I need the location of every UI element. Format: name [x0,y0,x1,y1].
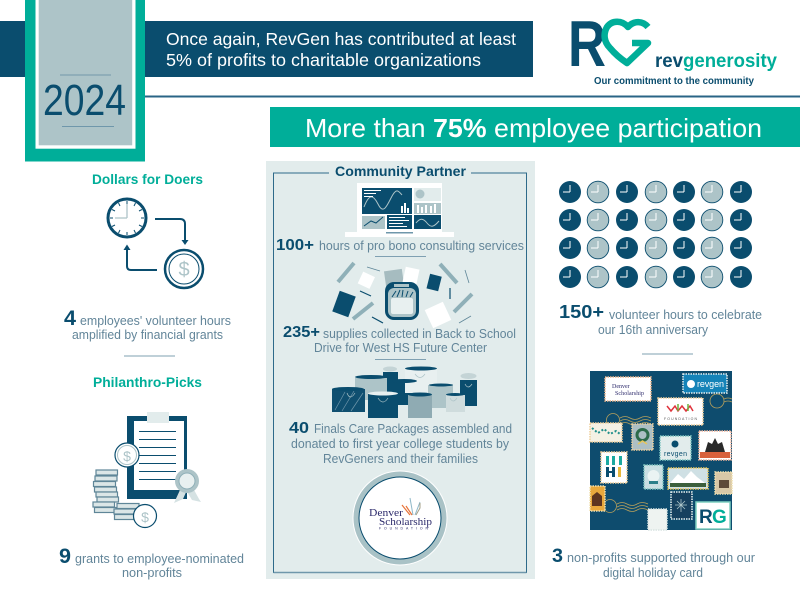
postmarks [604,394,732,512]
stamps [590,374,732,530]
section: Philanthro-Picks [59,375,244,580]
stat: 3 non-profits [552,546,755,580]
participation banner: More than 75% employee participation [305,113,762,143]
heading: Dollars for Doers [92,172,203,187]
icon: clipboard, coins and award: $ [141,509,149,525]
stat: 235+ supplies: Drive for West HS Future Center [314,341,487,355]
logo: revgenerosity: Our commitment to the community [594,75,754,87]
logo: Denver Scholarship Foundation: FOUNDATION [379,526,428,530]
digital holiday card [590,371,732,530]
header rule [145,96,800,98]
logo: revgenerosity: R [568,7,606,80]
panel heading: Community Partner [335,163,467,179]
banner statement [166,29,516,70]
stat: 4 employees: amplified by financial grants [72,328,223,342]
icon: backpack and school supplies [332,263,472,328]
icon: clipboard, coins and award: $ [123,448,131,464]
stat: 4 employees: employees' volunteer hours [80,314,231,328]
logo: revgenerosity [568,7,777,87]
clock grid [559,181,752,288]
stat: 9 grants [59,545,244,580]
stat: 40 care packages [289,420,512,466]
stat: 4 employees [64,307,231,342]
stamps: revgen [664,451,687,458]
stamps: revgen [697,379,724,389]
icon: clipboard, coins and award [93,412,201,528]
stat: 150+ volunteer hours: 150+ [559,301,604,322]
stat: 235+ supplies: supplies collected in Back to School [323,327,516,341]
heading: Philanthro-Picks [93,375,202,390]
logo: revgenerosity: generosity [683,50,777,72]
stat: 9 grants: 9 [59,545,71,568]
logo: revgenerosity: rev [655,50,683,72]
stat: 235+ supplies [283,324,516,355]
participation banner [270,107,800,147]
stat: 40 care packages: Finals Care Packages assembled and [314,422,512,436]
icon: laptop dashboard [345,183,454,237]
stat: 100+ hours: 100+ [276,237,314,254]
stat: 150+ volunteer hours: volunteer hours to celebrate [609,308,762,322]
icon: clock and coin cycle: $ [178,259,190,281]
panel: community partner [266,161,535,579]
stat: 40 care packages: 40 [289,420,309,437]
stamps: R [699,507,713,528]
stat: 4 employees: 4 [64,307,76,330]
year ribbon: 2024: 2024 [43,76,126,125]
banner statement: 5% of profits to charitable organizations [166,50,481,70]
logo: Denver Scholarship Foundation: Scholarship [379,516,432,528]
logo: Denver Scholarship Foundation [353,471,447,565]
stat: 3 non-profits: 3 [552,546,563,567]
stat: 40 care packages: donated to first year college students by [291,437,510,451]
stamps: Denver [612,384,630,390]
stamps: FOUNDATION [664,417,697,421]
icon: clock and coin cycle [108,199,203,288]
stamps: Scholarship [615,391,644,397]
stat: 100+ hours: hours of pro bono consulting services [319,239,524,253]
stat: 3 non-profits: digital holiday card [603,566,703,580]
stat: 9 grants: non-profits [122,566,182,580]
year ribbon: 2024 [25,0,145,162]
stat: 235+ supplies: 235+ [283,324,320,341]
stamps: G [712,507,727,528]
stat: 100+ hours [276,237,524,254]
stat: 9 grants: grants to employee-nominated [75,552,244,566]
header banner [0,21,533,77]
stat: 40 care packages: RevGeners and their families [323,452,478,466]
section: Dollars for Doers [64,172,231,342]
stat: 150+ volunteer hours: our 16th anniversary [598,323,709,337]
icon: care package bags [332,366,477,418]
banner statement: Once again, RevGen has contributed at least [166,29,516,49]
logo: Denver Scholarship Foundation: Denver [369,507,403,519]
stat: 150+ volunteer hours [559,301,762,337]
stat: 3 non-profits: non-profits supported through our [567,551,755,565]
